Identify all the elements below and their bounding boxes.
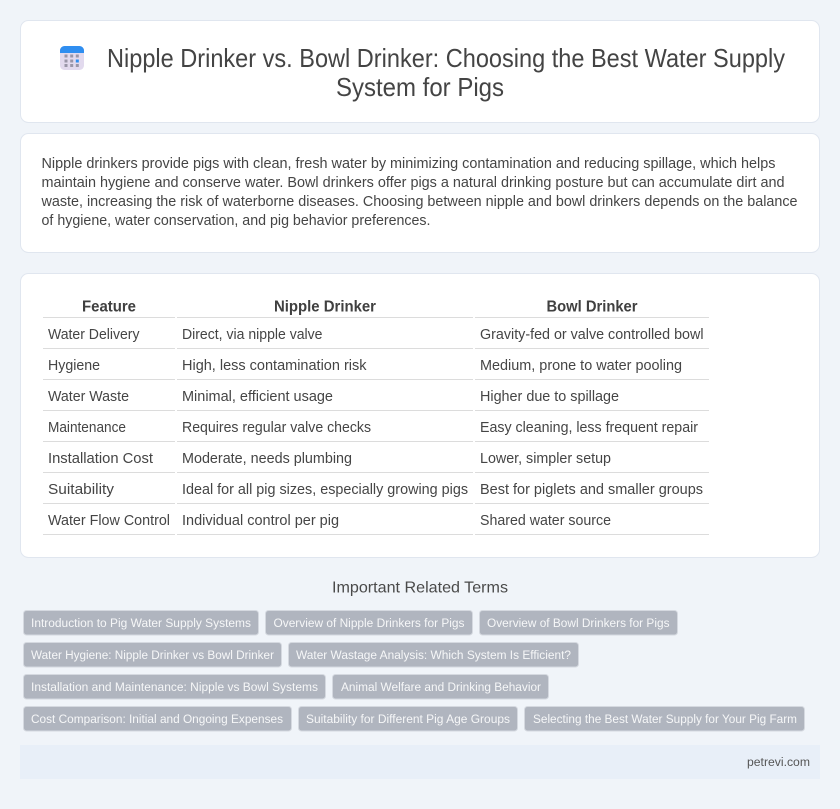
table row: installation cost: Lower, simpler setup bbox=[480, 451, 611, 467]
table row: suitability: Best for piglets and smaller groups bbox=[480, 482, 703, 498]
table row: hygiene: Medium, prone to water pooling bbox=[480, 358, 682, 374]
text block: introduction: Nipple drinkers provide pigs with clean, fresh water by minimizing contamination and reducing spillage, which helps bbox=[42, 156, 776, 172]
panel: comparison table bbox=[20, 274, 820, 558]
tag: installation: Installation and Maintenance: Nipple vs Bowl Systems bbox=[31, 680, 318, 694]
table row: maintenance: Maintenance bbox=[48, 420, 126, 436]
table row: suitability: Ideal for all pig sizes, especially growing pigs bbox=[182, 482, 468, 498]
table row: installation cost: Installation Cost bbox=[48, 451, 153, 467]
table row: water waste bbox=[48, 389, 619, 405]
table row: water waste: Minimal, efficient usage bbox=[182, 389, 333, 405]
tag: selecting: Selecting the Best Water Supply for Your Pig Farm bbox=[533, 712, 797, 726]
tag: selecting bbox=[524, 706, 804, 731]
text block: introduction: of hygiene, water conservation, and pig behavior preferences. bbox=[42, 213, 430, 229]
tag: cost comparison: Cost Comparison: Initial and Ongoing Expenses bbox=[31, 712, 283, 726]
table row: water flow control: Shared water source bbox=[480, 513, 611, 529]
table header: Bowl Drinker bbox=[546, 298, 638, 316]
table row: hygiene: High, less contamination risk bbox=[182, 358, 367, 374]
tag: animal welfare bbox=[332, 674, 548, 699]
tag: overview bowl: Overview of Bowl Drinkers for Pigs bbox=[487, 616, 670, 630]
table row: hygiene: Hygiene bbox=[48, 358, 100, 374]
tag: suitability: Suitability for Different Pig Age Groups bbox=[306, 712, 510, 726]
table row: installation cost: Moderate, needs plumbing bbox=[182, 451, 352, 467]
tag: introduction bbox=[24, 610, 258, 635]
table row: hygiene bbox=[48, 358, 682, 374]
table row: maintenance bbox=[48, 420, 698, 436]
heading: important related terms: Important Related Terms bbox=[332, 580, 508, 596]
panel: introduction text bbox=[20, 134, 820, 252]
tag: suitability bbox=[298, 706, 518, 731]
tag: overview bowl bbox=[480, 610, 678, 635]
title bbox=[107, 45, 785, 102]
tag: water hygiene: Water Hygiene: Nipple Drinker vs Bowl Drinker bbox=[31, 648, 274, 662]
text block: introduction: maintain hygiene and conserve water. Bowl drinkers offer pigs a natural drinking posture but can accumulate dirt and bbox=[42, 175, 784, 191]
tag: introduction: Introduction to Pig Water Supply Systems bbox=[31, 616, 251, 630]
table header: Nipple Drinker bbox=[274, 298, 376, 316]
tag: overview nipple bbox=[266, 610, 472, 635]
tag: animal welfare: Animal Welfare and Drinking Behavior bbox=[341, 680, 541, 694]
table row: water waste: Water Waste bbox=[48, 389, 129, 405]
table row: water delivery: Gravity-fed or valve controlled bowl bbox=[480, 327, 704, 343]
tag: installation bbox=[24, 674, 326, 699]
tag: cost comparison bbox=[24, 706, 292, 731]
related term tags bbox=[24, 610, 804, 731]
footer bbox=[20, 745, 820, 779]
tag: water wastage bbox=[288, 642, 578, 667]
table row: water flow control: Water Flow Control bbox=[48, 513, 170, 529]
table row: installation cost bbox=[48, 451, 611, 467]
table header: Feature bbox=[82, 298, 136, 316]
footer: petrevi.com bbox=[747, 755, 810, 769]
text block: introduction: waste, increasing the risk of waterborne diseases. Choosing between nipple and bowl drinkers depends on the balance bbox=[41, 194, 797, 210]
title: Nipple Drinker vs. Bowl Drinker: Choosing the Best Water Supply bbox=[107, 45, 785, 73]
text block: introduction bbox=[41, 156, 797, 229]
panel: header bbox=[20, 20, 820, 122]
table row: maintenance: Requires regular valve checks bbox=[182, 420, 371, 436]
table row: suitability bbox=[48, 482, 703, 498]
title: System for Pigs bbox=[336, 74, 504, 102]
tag: overview nipple: Overview of Nipple Drinkers for Pigs bbox=[274, 616, 464, 630]
table row: water delivery: Direct, via nipple valve bbox=[182, 327, 322, 343]
table row: water waste: Higher due to spillage bbox=[480, 389, 619, 405]
table row: water flow control: Individual control per pig bbox=[182, 513, 339, 529]
table row: maintenance: Easy cleaning, less frequent repair bbox=[480, 420, 698, 436]
tag: water hygiene bbox=[24, 642, 282, 667]
icon: calendar bbox=[60, 46, 84, 70]
table row: water delivery: Water Delivery bbox=[48, 327, 140, 343]
table header bbox=[82, 298, 638, 316]
table row: water flow control bbox=[48, 513, 611, 529]
table row: water delivery bbox=[48, 327, 704, 343]
table row: suitability: Suitability bbox=[48, 482, 115, 498]
tag: water wastage: Water Wastage Analysis: Which System Is Efficient? bbox=[296, 648, 571, 662]
